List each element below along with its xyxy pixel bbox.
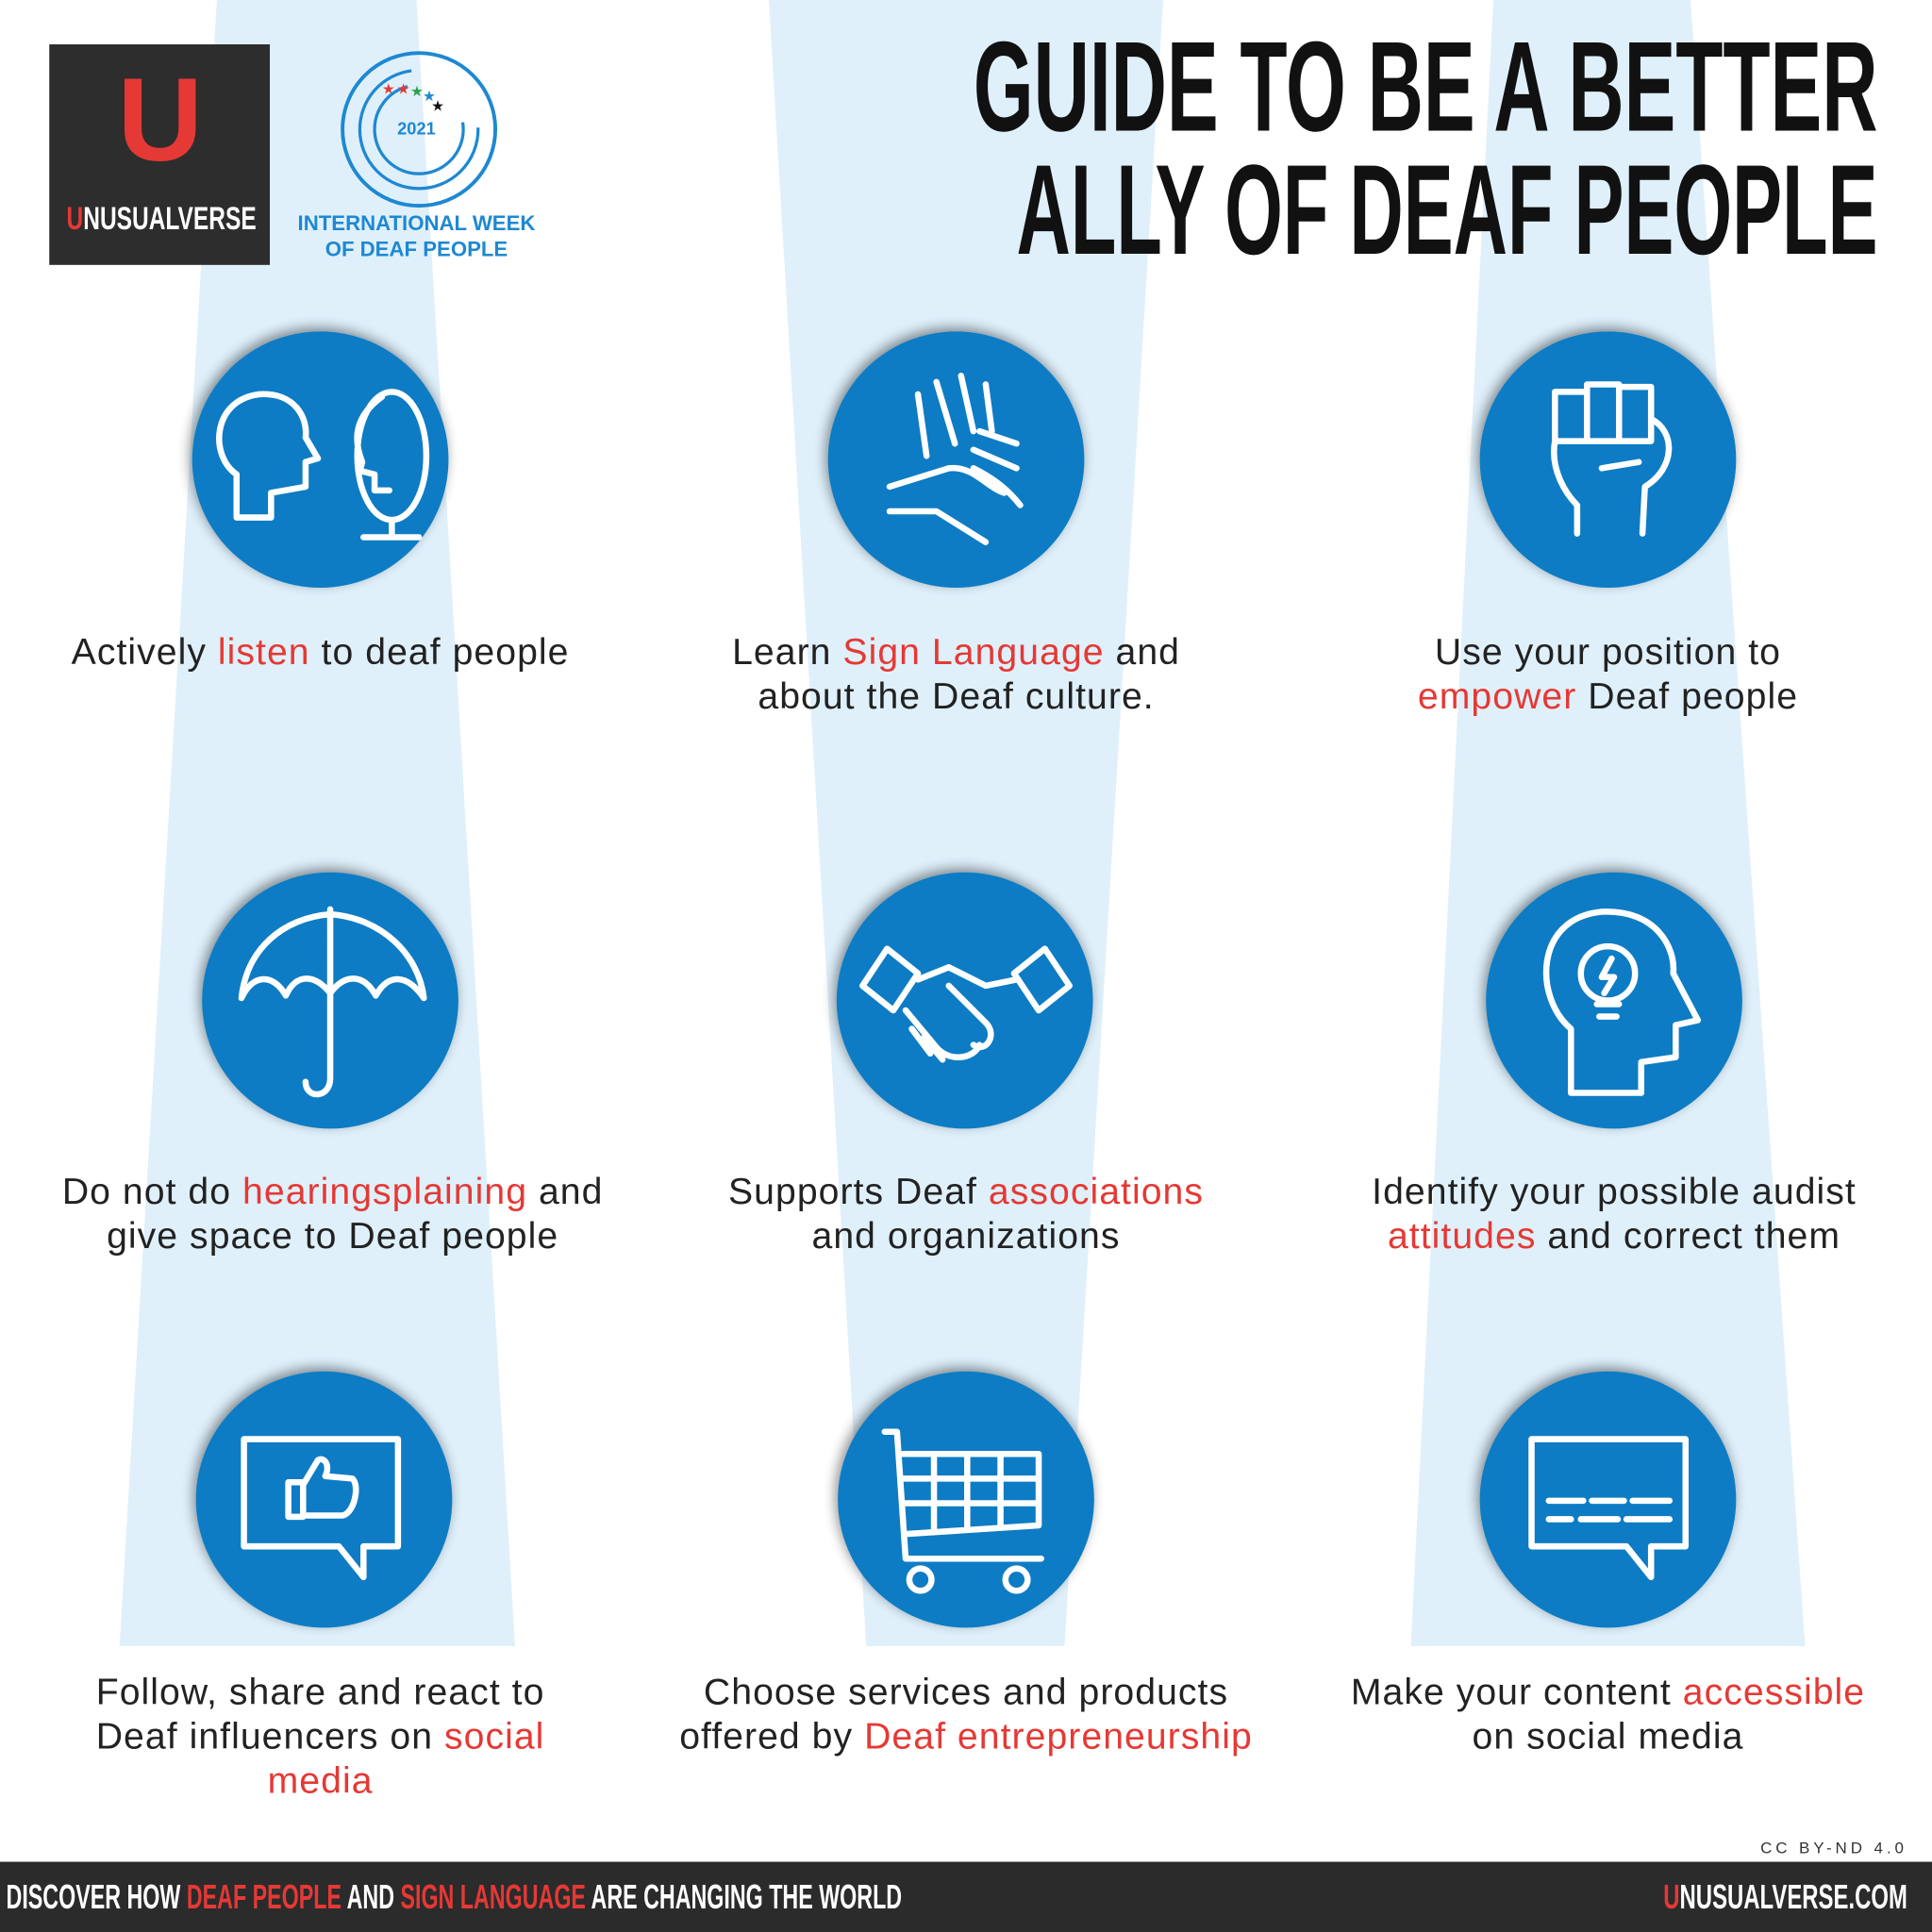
logo: international week of deaf people: ★: [397, 81, 410, 97]
text blocks: Learn Sign Language and: [732, 632, 1180, 673]
text blocks: offered by Deaf entrepreneurship: [679, 1716, 1253, 1757]
logo: international week of deaf people: INTERNATIONAL WEEK: [298, 211, 535, 235]
license: CC BY-ND 4.0: [1760, 1839, 1907, 1857]
logo: international week of deaf people: [298, 53, 535, 261]
logo: unusualverse: U: [118, 53, 203, 186]
text blocks: Use your position to: [1435, 632, 1781, 673]
text blocks: on social media: [1473, 1716, 1743, 1757]
text blocks: attitudes and correct them: [1388, 1216, 1840, 1257]
logo: international week of deaf people: OF DEAF PEOPLE: [325, 238, 508, 261]
icon: handshake: [862, 949, 1070, 1059]
icon: umbrella: [242, 909, 424, 1094]
text blocks: Supports Deaf associations: [728, 1172, 1204, 1212]
text blocks: empower Deaf people: [1418, 676, 1798, 717]
footer bar: [0, 1862, 1932, 1932]
logo: unusualverse: UNUSUALVERSE: [67, 201, 257, 237]
icon: sign language hands: [890, 375, 1020, 542]
icon: chat with thumbs up: [244, 1440, 398, 1577]
logo: international week of deaf people: ★: [382, 81, 395, 97]
footer bar: DISCOVER HOW DEAF PEOPLE AND SIGN LANGUAGE ARE CHANGING THE WORLD: [7, 1877, 902, 1916]
icon circles: [192, 331, 1742, 1627]
icon: chat with text lines: [1532, 1440, 1686, 1577]
text blocks: media: [268, 1760, 374, 1801]
title: [974, 14, 1878, 281]
text blocks: [62, 632, 1865, 1801]
text blocks: about the Deaf culture.: [758, 676, 1155, 717]
logo: unusualverse: [49, 44, 270, 265]
logo: international week of deaf people: ★: [410, 84, 424, 100]
icon: head with lightbulb: [1546, 911, 1698, 1093]
logo: international week of deaf people: 2021: [397, 118, 436, 138]
text blocks: Follow, share and react to: [96, 1672, 544, 1712]
logo: international week of deaf people: ★: [423, 89, 436, 105]
text blocks: Make your content accessible: [1351, 1672, 1865, 1712]
text blocks: Do not do hearingsplaining and: [62, 1172, 603, 1212]
logo: international week of deaf people: ★: [431, 99, 444, 115]
text blocks: and organizations: [811, 1216, 1121, 1257]
text blocks: Identify your possible audist: [1372, 1172, 1857, 1212]
icon: shopping cart: [885, 1432, 1041, 1591]
text blocks: give space to Deaf people: [107, 1216, 558, 1257]
text blocks: Choose services and products: [704, 1672, 1228, 1712]
background light beams: [120, 0, 1805, 1646]
text blocks: Actively listen to deaf people: [72, 632, 570, 673]
icon: heads: [219, 391, 426, 537]
text blocks: Deaf influencers on social: [96, 1716, 544, 1757]
icon: fist: [1554, 385, 1669, 534]
